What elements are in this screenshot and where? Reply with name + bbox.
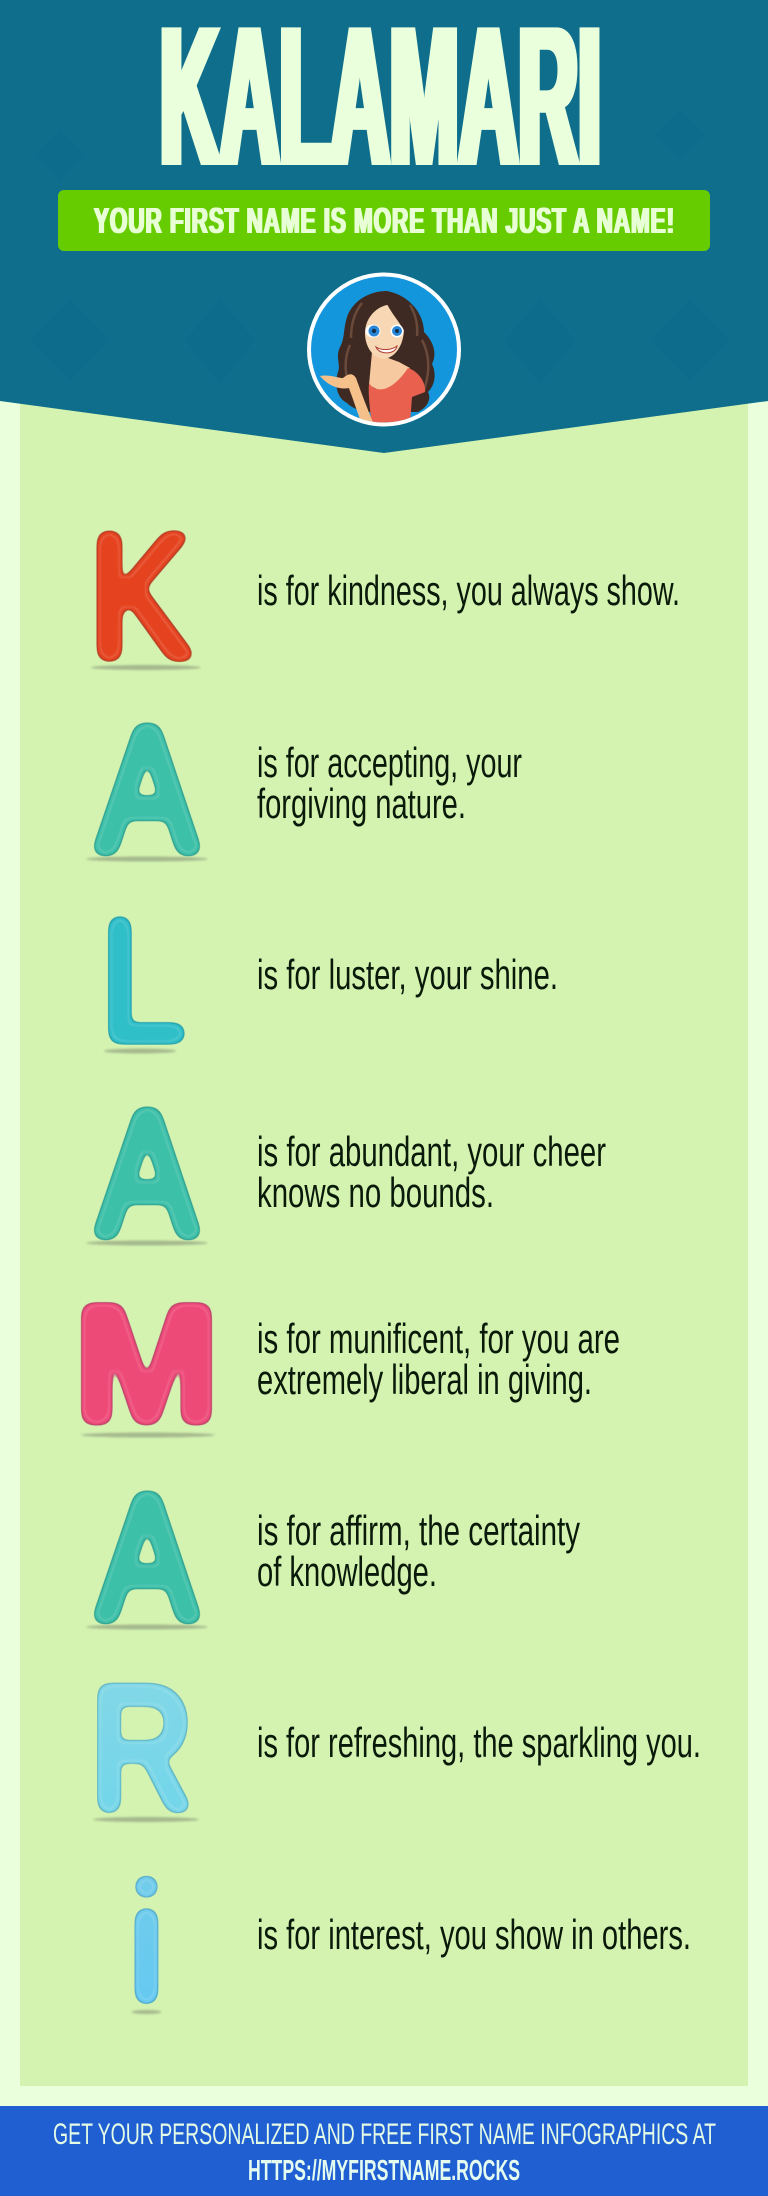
letter M: M	[74, 1272, 219, 1457]
letter L: L	[100, 882, 186, 1077]
letter R: R	[91, 1650, 193, 1845]
row 6: A	[86, 1460, 580, 1656]
letter i: i	[128, 1851, 165, 2036]
text: M line: extremely liberal in giving.	[257, 1356, 592, 1403]
row 2: A	[86, 692, 522, 888]
text: A line: forgiving nature.	[257, 780, 466, 827]
tagline banner	[58, 190, 710, 251]
text: L line: is for luster, your shine.	[257, 951, 558, 998]
text: A line: knows no bounds.	[257, 1169, 494, 1216]
letter A: A	[98, 1460, 197, 1656]
text: A line	[257, 1128, 606, 1216]
letter K: K	[90, 498, 191, 693]
letter A: A	[98, 692, 197, 888]
header background chevron	[0, 0, 768, 453]
text: A line: is for accepting, your	[257, 739, 522, 786]
letter A: A	[98, 1076, 197, 1272]
row 1: K	[90, 498, 680, 693]
text: M line: is for munificent, for you are	[257, 1315, 620, 1362]
text: A line: of knowledge.	[257, 1548, 437, 1595]
row 8: i	[128, 1851, 691, 2036]
text: A line	[257, 1507, 580, 1595]
row 7: R	[91, 1650, 701, 1845]
footer link: HTTPS://MYFIRSTNAME.ROCKS	[248, 2155, 520, 2187]
avatar: woman in circle	[309, 274, 459, 425]
row 4: A	[86, 1076, 606, 1272]
row 5: M	[74, 1272, 620, 1457]
text: A line	[257, 739, 522, 827]
text: A line: is for affirm, the certainty	[257, 1507, 580, 1554]
text: M line	[257, 1315, 620, 1403]
panel: letters area	[20, 380, 748, 2086]
footer	[0, 2106, 768, 2196]
row 3: L	[100, 882, 558, 1077]
text: A line: is for abundant, your cheer	[257, 1128, 606, 1175]
